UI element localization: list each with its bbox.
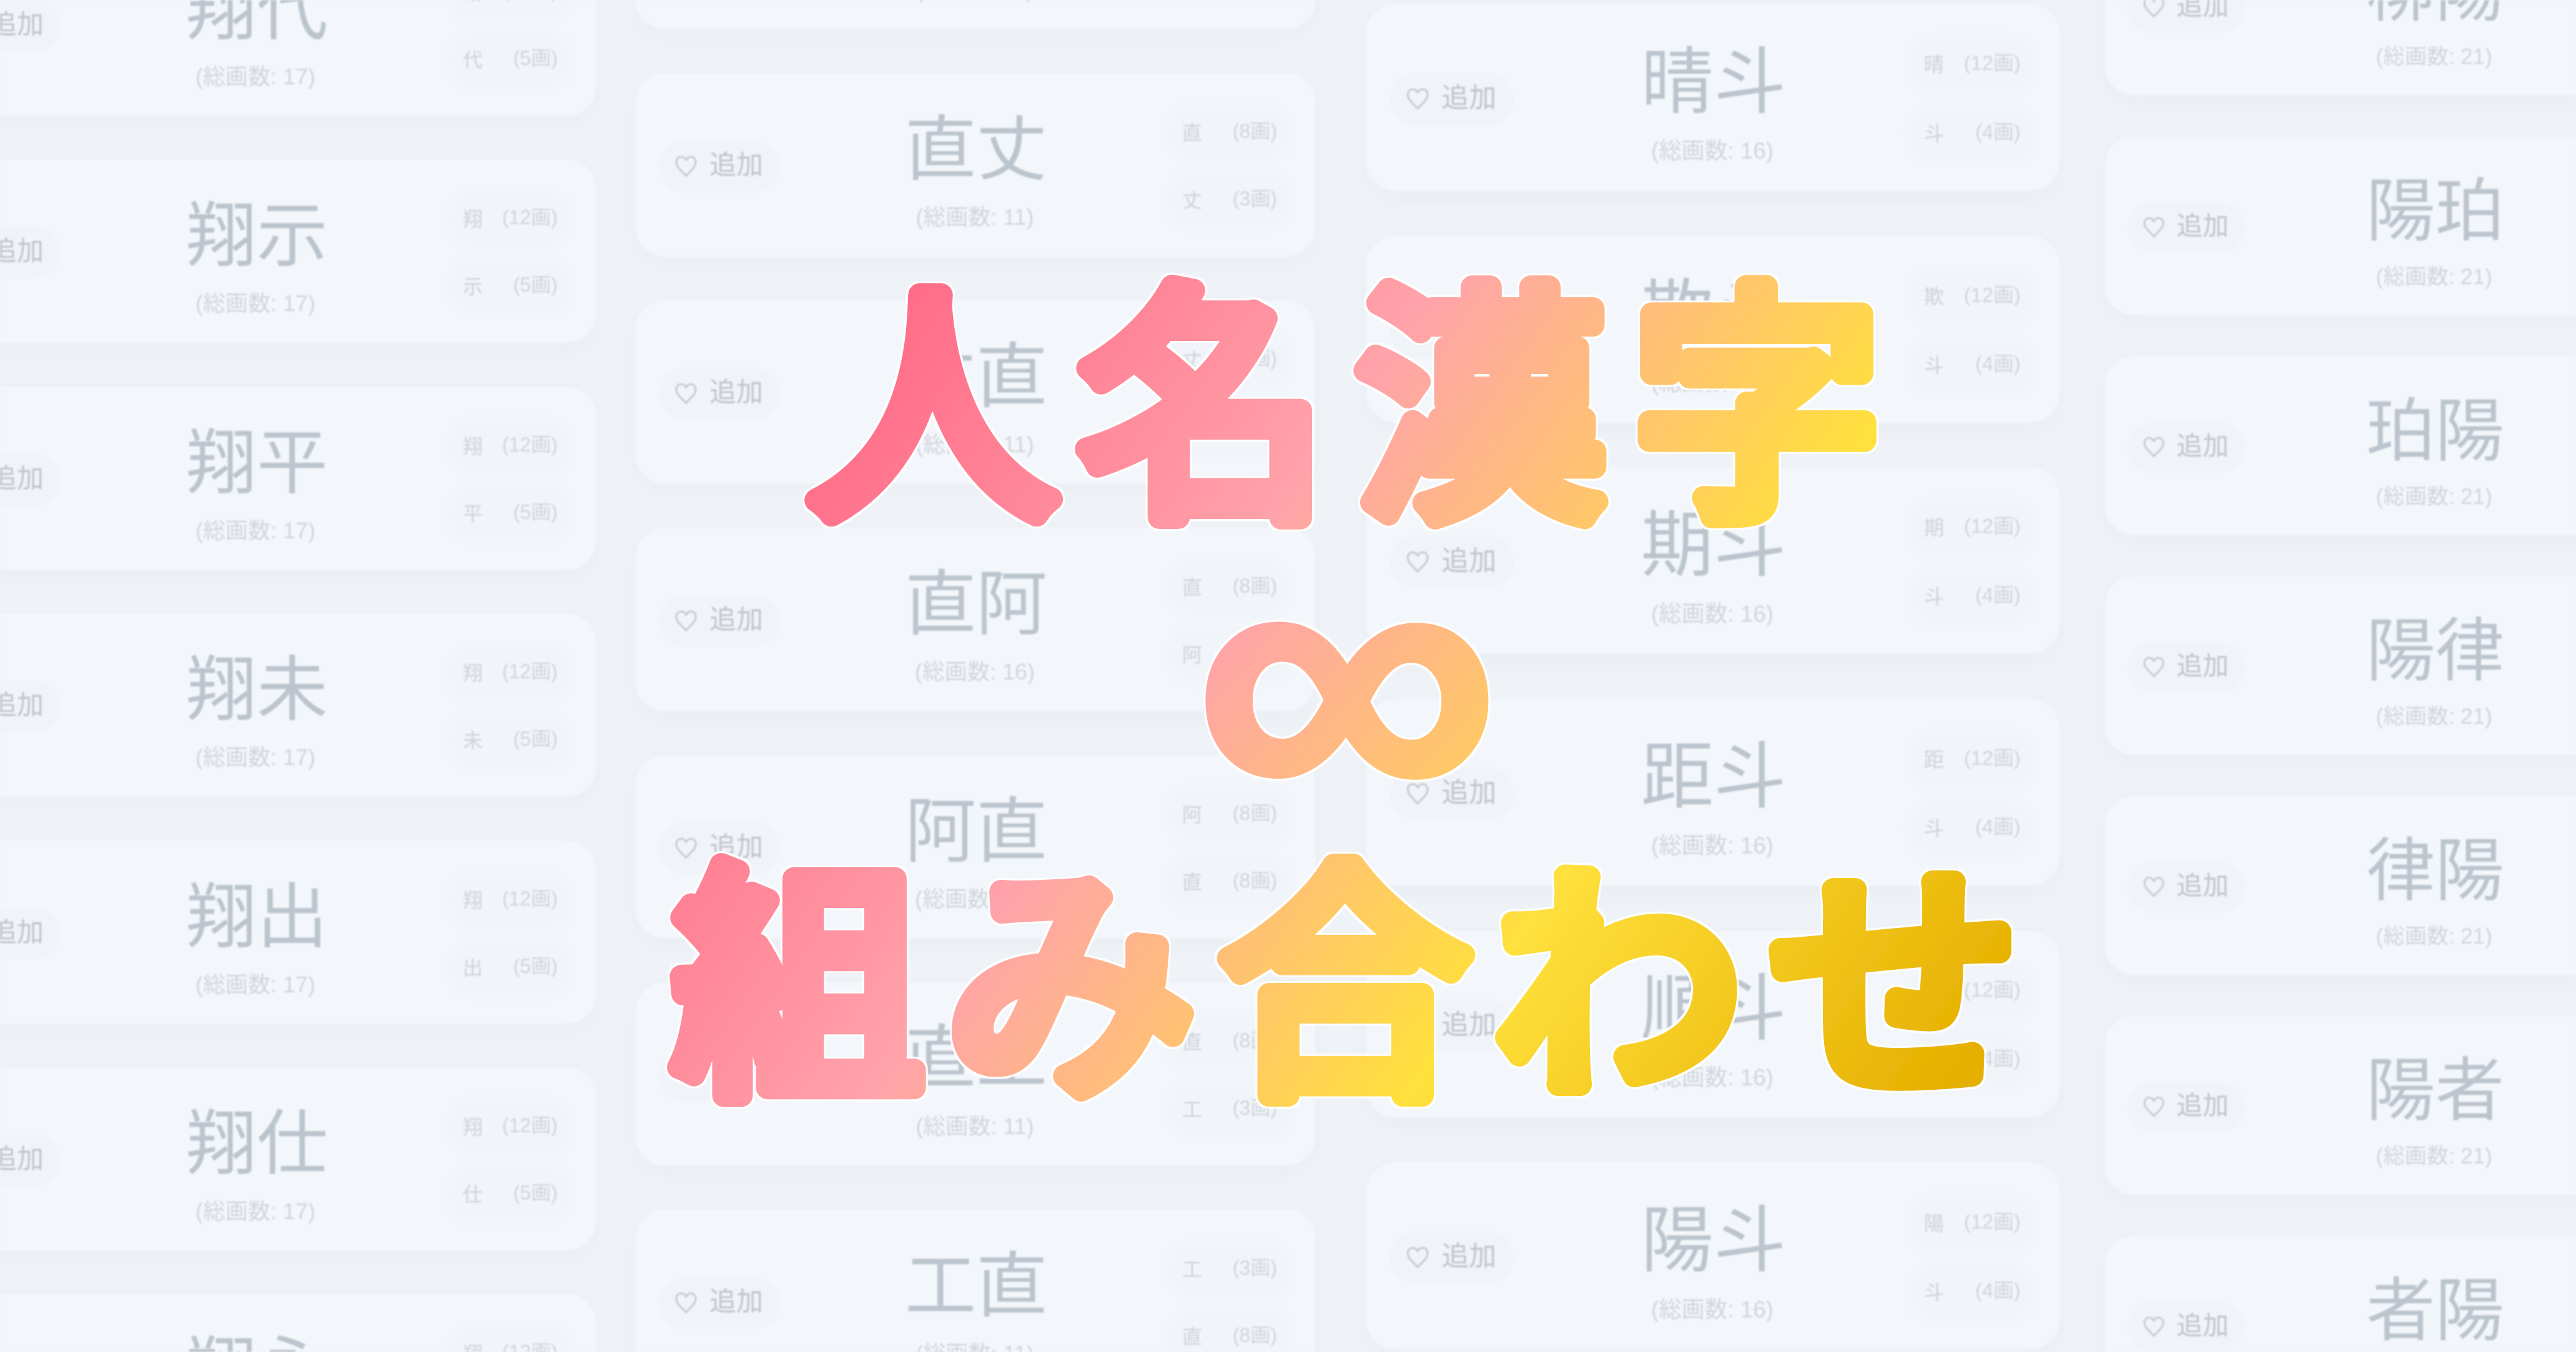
card: 晴斗: 晴斗 [1641,42,1786,123]
card: 丈直: 直 [1182,417,1202,439]
card: 翔仕 [0,1065,598,1252]
card: 直工: (8画) [1233,1029,1277,1052]
card: 晴斗: (4画) [1975,121,2021,143]
card: 律陽 [2103,794,2576,976]
card: 距斗: (12画) [1964,746,2021,769]
card: 順斗: 追加 [1441,1009,1496,1040]
card: 距斗: (総画数: 16) [1651,832,1774,859]
card: 翔出: 翔出 [185,878,328,957]
card: 翔示: (12画) [502,206,558,229]
card: 陽斗 [1364,1160,2061,1351]
card: 晴斗: 晴 [1924,54,1944,76]
card: 直工 [634,980,1317,1167]
card: 阿直: 阿 [1182,804,1202,826]
card: 翔代: 代 [463,49,483,71]
card: 阿直: 追加 [709,832,763,862]
card: 翔示: 翔示 [185,197,328,276]
card: 翔平: (5画) [513,501,558,523]
card: 律陽: 追加 [2176,872,2229,901]
card: 期斗: (総画数: 16) [1651,601,1774,627]
card: 直丈: 直丈 [905,111,1047,190]
card: 陽斗: (12画) [1964,1210,2021,1233]
card: 直丈: 追加 [709,150,763,180]
card: 距斗 [1364,697,2061,887]
card: 直丈: (8画) [1233,120,1277,142]
card: 丈直 [634,299,1317,485]
card: 直工: 直 [1182,1031,1202,1053]
card: 陽律: 追加 [2176,652,2229,681]
card: 翔仕: 翔 [463,1116,483,1138]
card: 翔平: (12画) [502,433,558,456]
card: 珀陽 [2103,355,2576,536]
card: 距斗: 距 [1924,748,1944,771]
card: 直丈: (3画) [1233,187,1277,210]
card: 翔平: 平 [463,503,483,525]
card: 晴斗: 斗 [1924,122,1944,145]
card: 順斗: (総画数: 16) [1651,1064,1774,1090]
card: 直阿: 阿 [1182,644,1202,666]
card: 珀陽: 追加 [2176,432,2229,461]
card: 翔未: 翔未 [185,651,328,730]
card: 距斗: 追加 [1441,777,1496,808]
card: 者陽: 者陽 [2366,1273,2504,1350]
title line 2: infinity symbol: ∞ [1197,471,1497,888]
card: 翔未 [0,611,598,798]
card: 直工: 追加 [709,1060,763,1090]
card: 律陽: (総画数: 21) [2376,924,2492,949]
card: 珀陽: (総画数: 21) [2376,484,2492,509]
card: 期斗: 追加 [1441,546,1496,576]
card: 工直: 直 [1182,1326,1202,1348]
card: 直丈: 丈 [1182,189,1202,212]
card: 阿直: (総画数: 16) [915,886,1035,912]
card: 期斗: (12画) [1964,515,2021,538]
column 4: 陽 names [2143,0,2504,1350]
card: 工直: 工 [1182,1258,1202,1281]
card: 欺斗: (12画) [1964,283,2021,306]
title line 3: 組み合わせ: 組み合わせ [673,849,2019,1128]
card: 晴斗: (総画数: 16) [1651,137,1774,164]
card: partial top card [634,0,1317,31]
card: 者陽 [2103,1235,2576,1352]
card: 丈直: (3画) [1233,347,1277,370]
card: 直丈: (総画数: 11) [915,204,1034,230]
card: 翔未: 翔 [463,662,483,684]
card: 期斗: 期 [1924,517,1944,540]
card: 期斗 [1364,465,2061,656]
card: 直丈: 直 [1182,122,1202,144]
card: 陽者: (総画数: 21) [2376,1143,2492,1168]
card: 陽珀: (総画数: 21) [2376,264,2492,289]
card: 丈直: 丈 [1182,349,1202,372]
card: 珀陽: 珀陽 [2366,393,2504,470]
card: 工直: (3画) [1233,1256,1277,1279]
card: 欺斗: 追加 [1441,314,1496,345]
card: 阿直 [634,753,1317,940]
card: 翔代: (総画数: 17) [195,64,315,89]
card: 阿直: 直 [1182,871,1202,894]
card: 翔未: (5画) [513,728,558,750]
card: 翔仕: 仕 [463,1183,483,1206]
card: 翔出: (総画数: 17) [195,972,315,997]
card: 翔出: 出 [463,957,483,979]
card: 柳陽: (総画数: 21) [2376,44,2492,69]
card: 翔代 [0,0,598,117]
card: 翔出 [0,839,598,1025]
card: 陽斗: 陽 [1924,1211,1944,1235]
card: 陽珀: 追加 [2176,212,2229,241]
card: 陽斗: 斗 [1924,1281,1944,1303]
card: 直阿: 直阿 [905,565,1047,644]
card: 丈直: (総画数: 11) [915,432,1034,457]
card: 者陽: 追加 [2176,1311,2229,1340]
card: 阿直: (8画) [1233,869,1277,892]
card: 順斗: (4画) [1975,1047,2021,1070]
card: 柳陽 [2103,0,2576,96]
card: 陽律 [2103,575,2576,756]
card: 律陽: 律陽 [2366,833,2504,910]
card: 丈直: (8画) [1233,415,1277,437]
card: 翔平: 翔平 [185,424,328,503]
card: 直丈 [634,71,1317,258]
card: 直阿: (8画) [1233,575,1277,597]
card: 直工: 直工 [905,1020,1047,1099]
card: 阿直: (8画) [1233,802,1277,824]
card: 晴斗: 追加 [1441,82,1496,113]
card: 翔仕: (5画) [513,1182,558,1204]
card: 直工: 工 [1182,1098,1202,1121]
card: 距斗: 斗 [1924,817,1944,840]
card: 順斗 [1364,929,2061,1119]
card: 工直 [634,1208,1317,1352]
column 3: 斗 names [1406,42,2021,1322]
card: 翔示 [0,157,598,344]
card: 翔平: 翔 [463,435,483,458]
card: 直工: (総画数: 11) [915,1113,1034,1139]
card: 陽斗: 追加 [1441,1241,1496,1271]
card: 順斗: 順斗 [1641,969,1786,1050]
card: 翔未: (総画数: 17) [195,744,315,770]
card: 阿直: 阿直 [905,792,1047,872]
card: 翔永 [0,1292,598,1352]
card: 順斗: (12画) [1964,978,2021,1001]
card: 陽珀 [2103,135,2576,316]
card: 陽律: (総画数: 21) [2376,704,2492,729]
card: 直阿: 直 [1182,576,1202,599]
card: 翔出: (5画) [513,955,558,977]
column 2: 直 names [674,0,1277,1352]
card: 晴斗: (12画) [1964,52,2021,74]
card: 陽斗: (4画) [1975,1279,2021,1301]
card: 翔仕: (12画) [502,1114,558,1137]
card: 欺斗: 斗 [1924,354,1944,377]
card: 翔示: 翔 [463,208,483,230]
card: 順斗: 斗 [1924,1049,1944,1072]
card: 直阿: (8画) [1233,642,1277,664]
card: 陽斗: (総画数: 16) [1651,1296,1774,1322]
card: 欺斗: 欺 [1924,285,1944,308]
card: 翔未: (12画) [502,660,558,683]
card: 翔平 [0,385,598,571]
card: 期斗: 期斗 [1641,505,1786,586]
card: 陽珀: 陽珀 [2366,173,2504,250]
card: 順斗: 順 [1924,980,1944,1003]
card: 陽者: 追加 [2176,1092,2229,1120]
card: 翔仕: 翔仕 [185,1105,328,1184]
card: 丈直: 丈直 [905,338,1047,417]
card: 翔未: 未 [463,729,483,752]
card: 陽者 [2103,1015,2576,1196]
card: 陽斗: 陽斗 [1641,1200,1786,1281]
card: 翔示: (5画) [513,274,558,296]
card: 欺斗 [1364,234,2061,424]
card: 翔示: 示 [463,275,483,298]
card: 直阿: 追加 [709,605,763,635]
card: 欺斗: 欺斗 [1641,274,1786,355]
column 1: 翔 names [0,0,558,1352]
card: 翔出: (12画) [502,887,558,910]
card: 工直: 工直 [905,1247,1047,1326]
card: 距斗: (4画) [1975,816,2021,838]
card: 翔代: (5画) [513,47,558,69]
card: 翔仕: (総画数: 17) [195,1198,315,1224]
card: 直阿: (総画数: 16) [915,659,1035,684]
card: 直阿 [634,526,1317,713]
card: 丈直: 追加 [709,378,763,408]
card: 直工: (3画) [1233,1097,1277,1119]
card: 期斗: (4画) [1975,584,2021,606]
title line 1: 人名漢字: 人名漢字 [808,271,1882,550]
card: 工直: (8画) [1233,1324,1277,1346]
card: 欺斗: (総画数: 16) [1651,369,1774,395]
card: 陽者: 陽者 [2366,1053,2504,1130]
card: 翔出: 翔 [463,889,483,912]
card: 晴斗 [1364,2,2061,192]
card: 翔示: (総画数: 17) [195,290,315,316]
card: 工直: 追加 [709,1287,763,1317]
card: 期斗: 斗 [1924,586,1944,608]
card: 距斗: 距斗 [1641,737,1786,818]
card: 翔平: (総画数: 17) [195,518,315,543]
card: 欺斗: (4画) [1975,352,2021,375]
card: 陽律: 陽律 [2366,613,2504,690]
